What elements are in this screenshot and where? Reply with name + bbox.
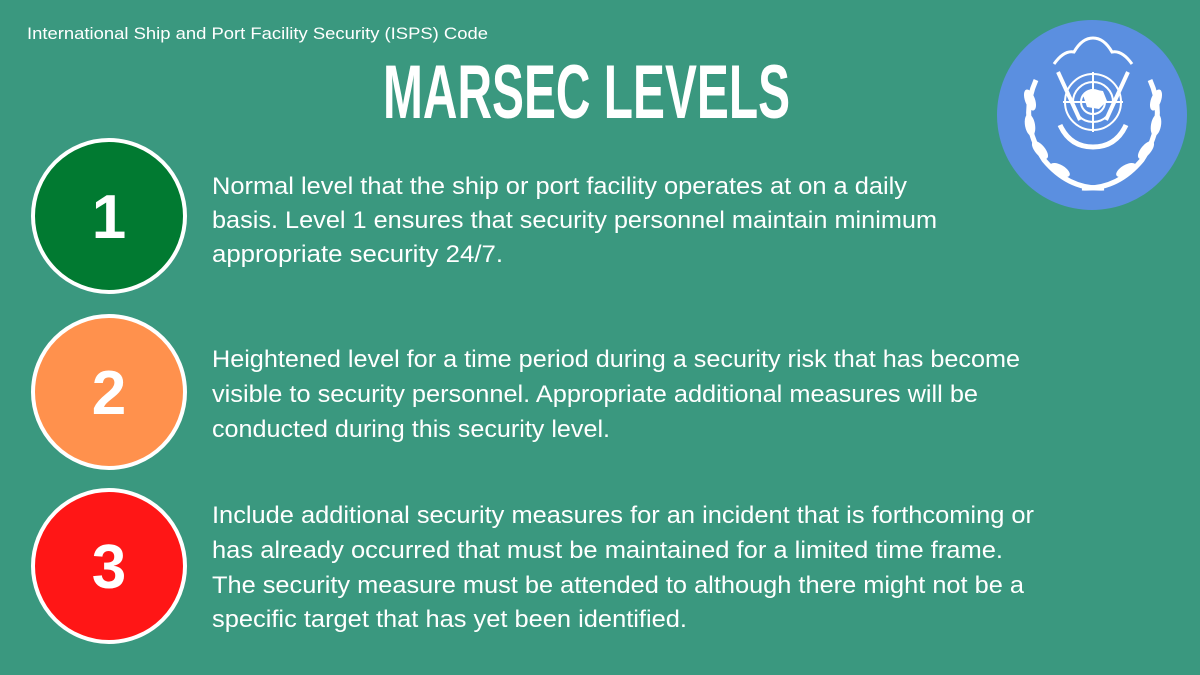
level 2 text: visible to security personnel. Appropriate additional measures will be	[212, 381, 978, 408]
level 3 text: specific target that has yet been identified.	[212, 606, 687, 633]
level 1 text: basis. Level 1 ensures that security personnel maintain minimum	[212, 207, 937, 234]
level 1 text: Normal level that the ship or port facility operates at on a daily	[212, 173, 907, 200]
level 2 circle	[33, 316, 185, 468]
level 1 circle	[33, 140, 185, 292]
level 2 circle: 2	[92, 359, 126, 428]
level 2 text: Heightened level for a time period during a security risk that has become	[212, 346, 1020, 373]
level 3 text: The security measure must be attended to although there might not be a	[212, 572, 1025, 599]
level 3 text: Include additional security measures for an incident that is forthcoming or	[212, 502, 1034, 529]
title: MARSEC LEVELS	[383, 50, 790, 135]
level 3 circle	[33, 490, 185, 642]
subtitle: International Ship and Port Facility Security (ISPS) Code	[27, 24, 488, 43]
icon: IMO logo	[997, 20, 1187, 210]
level 3 text: has already occurred that must be maintained for a limited time frame.	[212, 537, 1003, 564]
level 1 text	[212, 173, 937, 268]
level 3 text	[212, 502, 1034, 633]
level 1 text: appropriate security 24/7.	[212, 241, 503, 268]
level 2 text	[212, 346, 1020, 443]
level 2 text: conducted during this security level.	[212, 416, 610, 443]
level 3 circle: 3	[92, 533, 126, 602]
level 1 circle: 1	[92, 183, 126, 252]
